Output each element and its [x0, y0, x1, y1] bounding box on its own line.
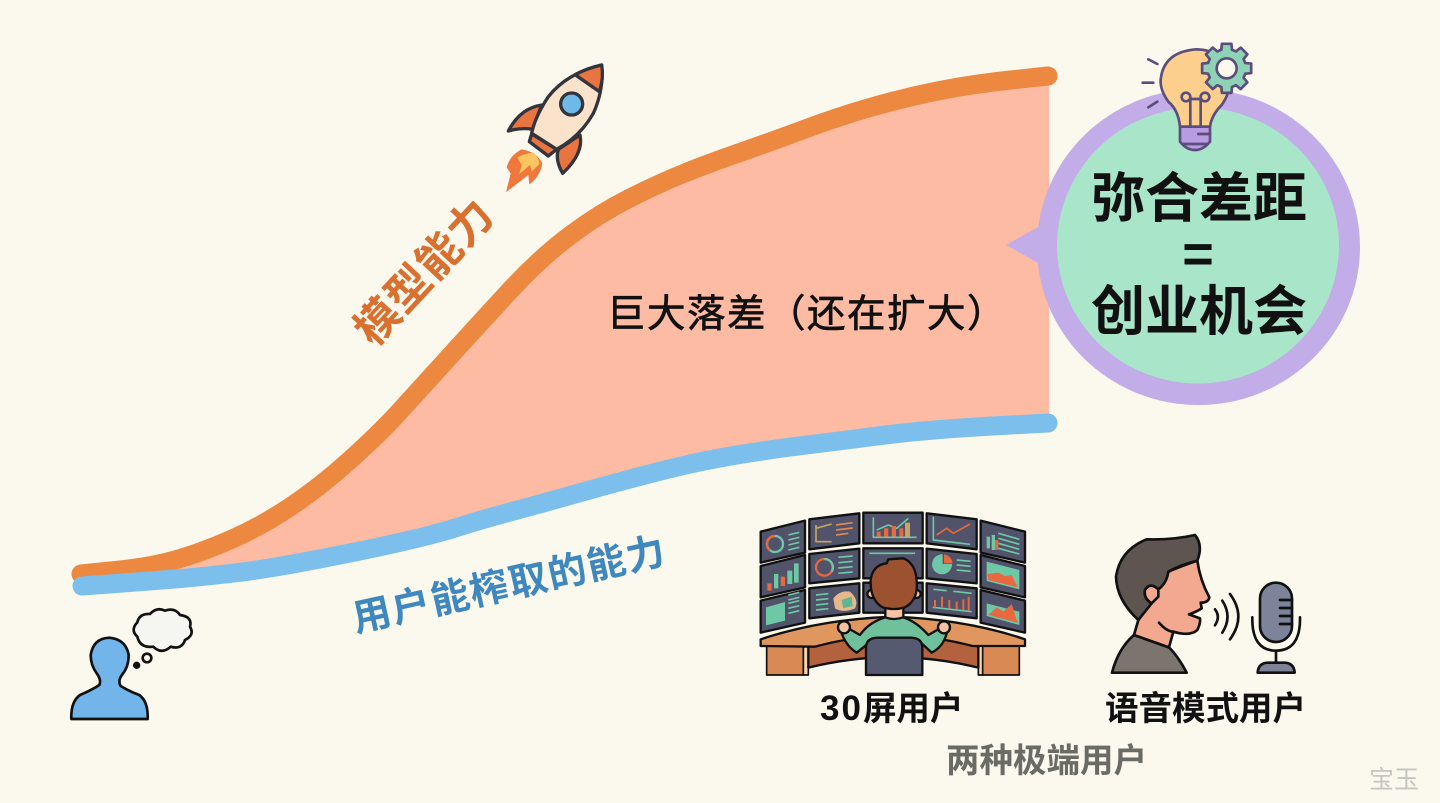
- callout: closing the gap: 弥合差距: [1091, 169, 1307, 229]
- callout: closing the gap: [1006, 89, 1360, 405]
- curve: model capability: [81, 76, 1048, 574]
- label: huge gap: 巨大落差（还在扩大）: [607, 293, 1007, 336]
- label: two extreme user types: 两种极端用户: [946, 743, 1147, 780]
- icon: voice mode user with microphone: [1112, 535, 1300, 673]
- label: user extractable capability: 用户能榨取的能力: [349, 530, 670, 641]
- curve: user capability: [82, 423, 1048, 586]
- callout: closing the gap: =: [1182, 224, 1214, 284]
- icon: person with thought bubble: [71, 609, 192, 719]
- chart details: [767, 517, 1019, 613]
- monitor wall: [761, 513, 1025, 633]
- seated user: [838, 558, 950, 675]
- gap area between the two curves: [150, 76, 1049, 577]
- icon: rocket: [506, 65, 602, 192]
- desk: [761, 617, 1025, 675]
- callout: closing the gap: 创业机会: [1091, 282, 1307, 342]
- icon: 30-screen user at a desk: [761, 513, 1025, 675]
- label: model capability: 模型能力: [345, 190, 504, 355]
- icon: light bulb with gear: [1143, 44, 1251, 150]
- chart fills: [766, 523, 1019, 625]
- label: voice mode user: 语音模式用户: [1105, 691, 1306, 728]
- label: 30-screen user: 30屏用户: [820, 689, 963, 728]
- watermark: 宝玉: [1369, 766, 1419, 794]
